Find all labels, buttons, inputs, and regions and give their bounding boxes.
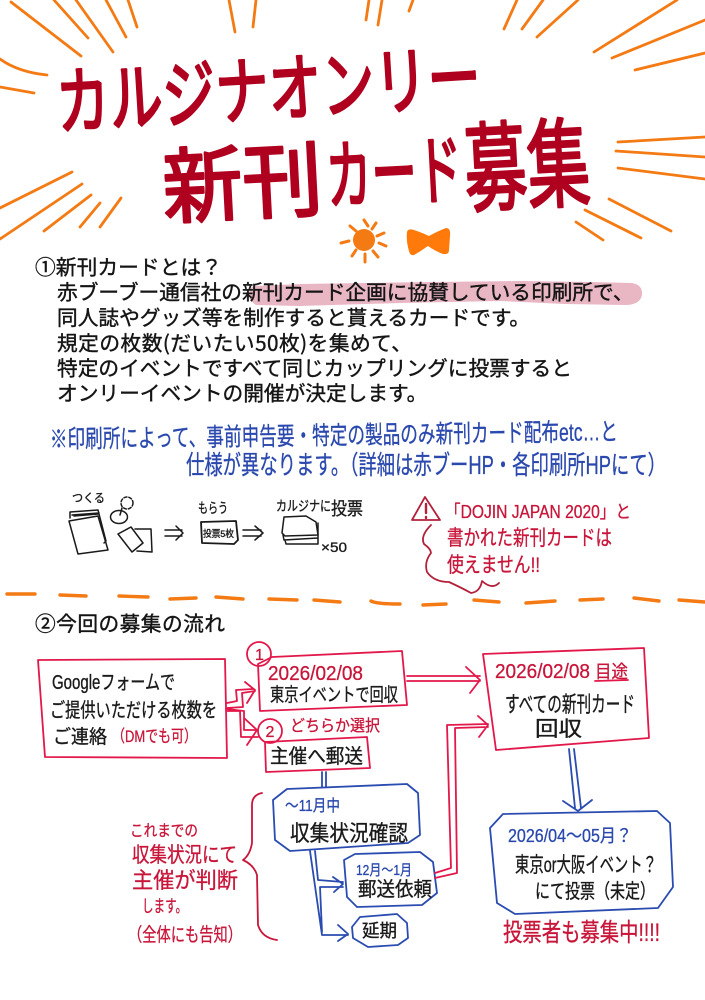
box: google form [38,659,227,758]
step: vote with fifty cards: 投票 [331,499,363,519]
body paragraph: オンリーイベントの開催が決定します。 [57,376,427,406]
warning callout [412,497,631,593]
body paragraph [57,276,634,406]
note: organizer decides: （全体にも告知） [128,924,242,946]
box: all cards collected: 目途 [595,662,628,682]
box: postponed: 延期 [362,921,397,941]
box: option 2: 主催へ郵送 [270,745,363,768]
arrow: mail request to collection [435,716,488,878]
title [54,36,593,241]
box: option 2 [258,717,380,772]
icon: orange bow tie [407,228,450,255]
title: 募集 [461,110,593,225]
box: option 1 [247,642,407,711]
box: all cards collected: すべての新刊カード [505,692,635,717]
section 1 heading: ①新刊カードとは？ [35,250,222,280]
step: receive card: もらう [198,500,228,516]
body paragraph: 同人誌やグッズ等を制作すると貰えるカードです。 [57,301,530,331]
step: make books and goods: つくる [72,491,105,505]
arrows: status check to mail request and postponement [310,851,348,941]
call for voters: 投票者も募集中!!!! [503,919,660,947]
body paragraph: 規定の枚数(だいたい50枚)を集めて、 [57,326,412,356]
step: vote with fifty cards: カルジナに [276,498,331,514]
step: make books and goods [69,491,152,554]
box: status check: 収集状況確認 [290,821,408,846]
box: all cards collected: 2026/02/08 [495,661,590,683]
process sketch: make, receive, vote [69,491,363,555]
arrows: form to options [227,682,258,745]
title: カルジナオンリー [54,36,483,145]
title: カード [324,128,464,220]
arrow: option 1 to collection [407,667,480,693]
box: vote event: 2026/04～05月？ [508,826,632,846]
section 2 heading: ②今回の募集の流れ [35,607,225,637]
icon: sun [341,220,386,262]
box: status check: ～11月中 [285,797,340,815]
box: google form: ご連絡 [53,726,107,748]
warning callout: 「DOJIN JAPAN 2020」と [445,502,631,522]
note: organizer decides [128,823,242,946]
note: organizer decides: 収集状況にて [132,844,237,867]
box: option 1: 東京イベントで回収 [270,684,398,706]
box: option 1: 1 [255,647,264,664]
box: mail request: 郵送依頼 [358,878,432,901]
title: 新刊 [160,136,325,235]
body paragraph: 赤ブーブー通信社の新刊カード企画に協賛している印刷所で、 [57,276,634,306]
box: all cards collected: 回収 [535,718,582,741]
box: mail request [344,852,437,907]
icon: warning triangle [412,497,440,520]
pink highlight [249,281,642,306]
note: organizer decides: これまでの [130,823,198,840]
arrow [165,526,183,540]
box: option 2: どちらか選択 [290,717,380,735]
box: option 2: 2 [266,724,274,741]
warning callout: 書かれた新刊カードは [447,527,612,550]
note: organizer decides: 主催が判断 [132,868,238,893]
blue handwritten note [50,418,666,480]
body paragraph: 特定のイベントですべて同じカップリングに投票すると [57,352,572,382]
step: vote with fifty cards: ×50 [321,539,347,555]
warning callout: 使えません!! [447,554,540,577]
note: organizer decides: します。 [142,897,187,916]
box: postponed [352,914,408,947]
box: vote event: にて投票（未定） [535,880,655,903]
orange burst rays around title [0,0,705,240]
bracket [243,793,277,940]
box: status check [273,784,420,851]
box: all cards collected [483,648,649,750]
step: receive card: 投票5枚 [203,528,234,540]
arrow [243,526,263,540]
box: google form: （DMでも可） [112,727,197,746]
box: mail request: 12月～1月 [356,862,412,879]
arrow: collection to vote [563,749,592,811]
orange dashed divider [7,594,705,605]
step: vote with fifty cards [276,498,363,555]
flowchart [38,642,673,947]
box: option 1: 2026/02/08 [268,663,363,685]
step: receive card [198,500,238,544]
box: vote event [490,811,673,914]
box: google form: ご提供いただける枚数を [50,699,217,722]
box: google form: Googleフォームで [52,672,175,694]
connector: to status check [322,772,326,787]
